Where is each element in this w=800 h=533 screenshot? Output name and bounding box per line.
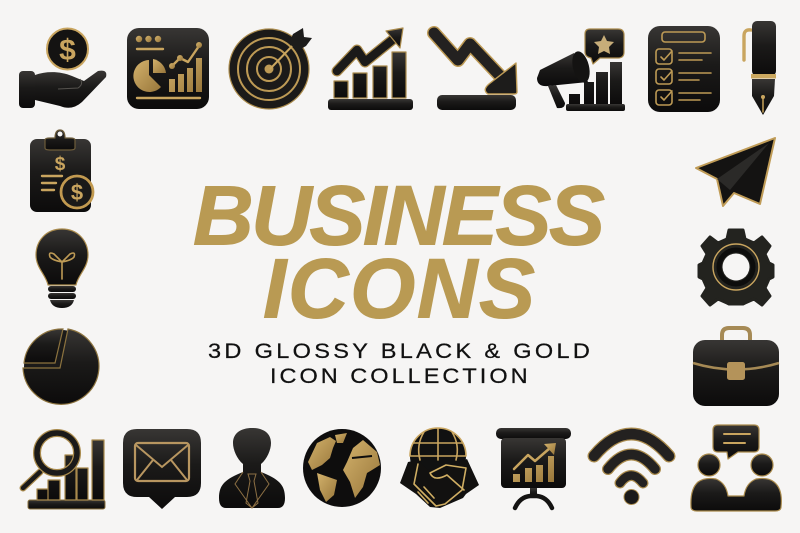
icon: growth chart <box>328 28 413 110</box>
title: BUSINESS ICONS <box>193 168 605 336</box>
subtitle: 3D GLOSSY BLACK & GOLD <box>208 339 590 363</box>
icon: magnifier over bars <box>23 433 105 509</box>
icon: light bulb <box>36 229 88 308</box>
icon: target with arrow <box>229 28 312 109</box>
icon: hand holding dollar coin <box>19 28 106 108</box>
icon: paper plane <box>696 138 775 206</box>
icon: hand holding dollar coin: $ <box>59 34 76 67</box>
icon: team meeting with chat bubble <box>691 425 781 511</box>
icon: briefcase <box>693 328 779 406</box>
title: BUSINESS ICONS: BUSINESS <box>193 168 605 262</box>
title: BUSINESS ICONS: ICONS <box>263 242 535 336</box>
icon: gear <box>699 230 773 305</box>
subtitle: ICON COLLECTION <box>270 364 528 388</box>
icon: dashboard with charts <box>127 28 209 109</box>
icon: mail speech bubble <box>123 429 201 509</box>
icon: clipboard with coin <box>30 130 93 212</box>
icon: falling chart <box>434 33 517 110</box>
icon: presentation board <box>496 428 571 508</box>
icon: checklist <box>648 26 720 112</box>
icon: wifi signal <box>594 434 669 504</box>
icon: handshake with globe <box>400 428 479 508</box>
icon: globe <box>303 429 381 507</box>
icon: fountain pen <box>744 21 776 115</box>
subtitle <box>208 339 590 388</box>
icon: megaphone with star bubble <box>537 29 625 111</box>
icon: pie chart <box>23 329 99 404</box>
icon: clipboard with coin: $ <box>55 154 66 175</box>
icon: businessman <box>219 428 285 508</box>
icon: clipboard with coin: $ <box>71 180 83 205</box>
